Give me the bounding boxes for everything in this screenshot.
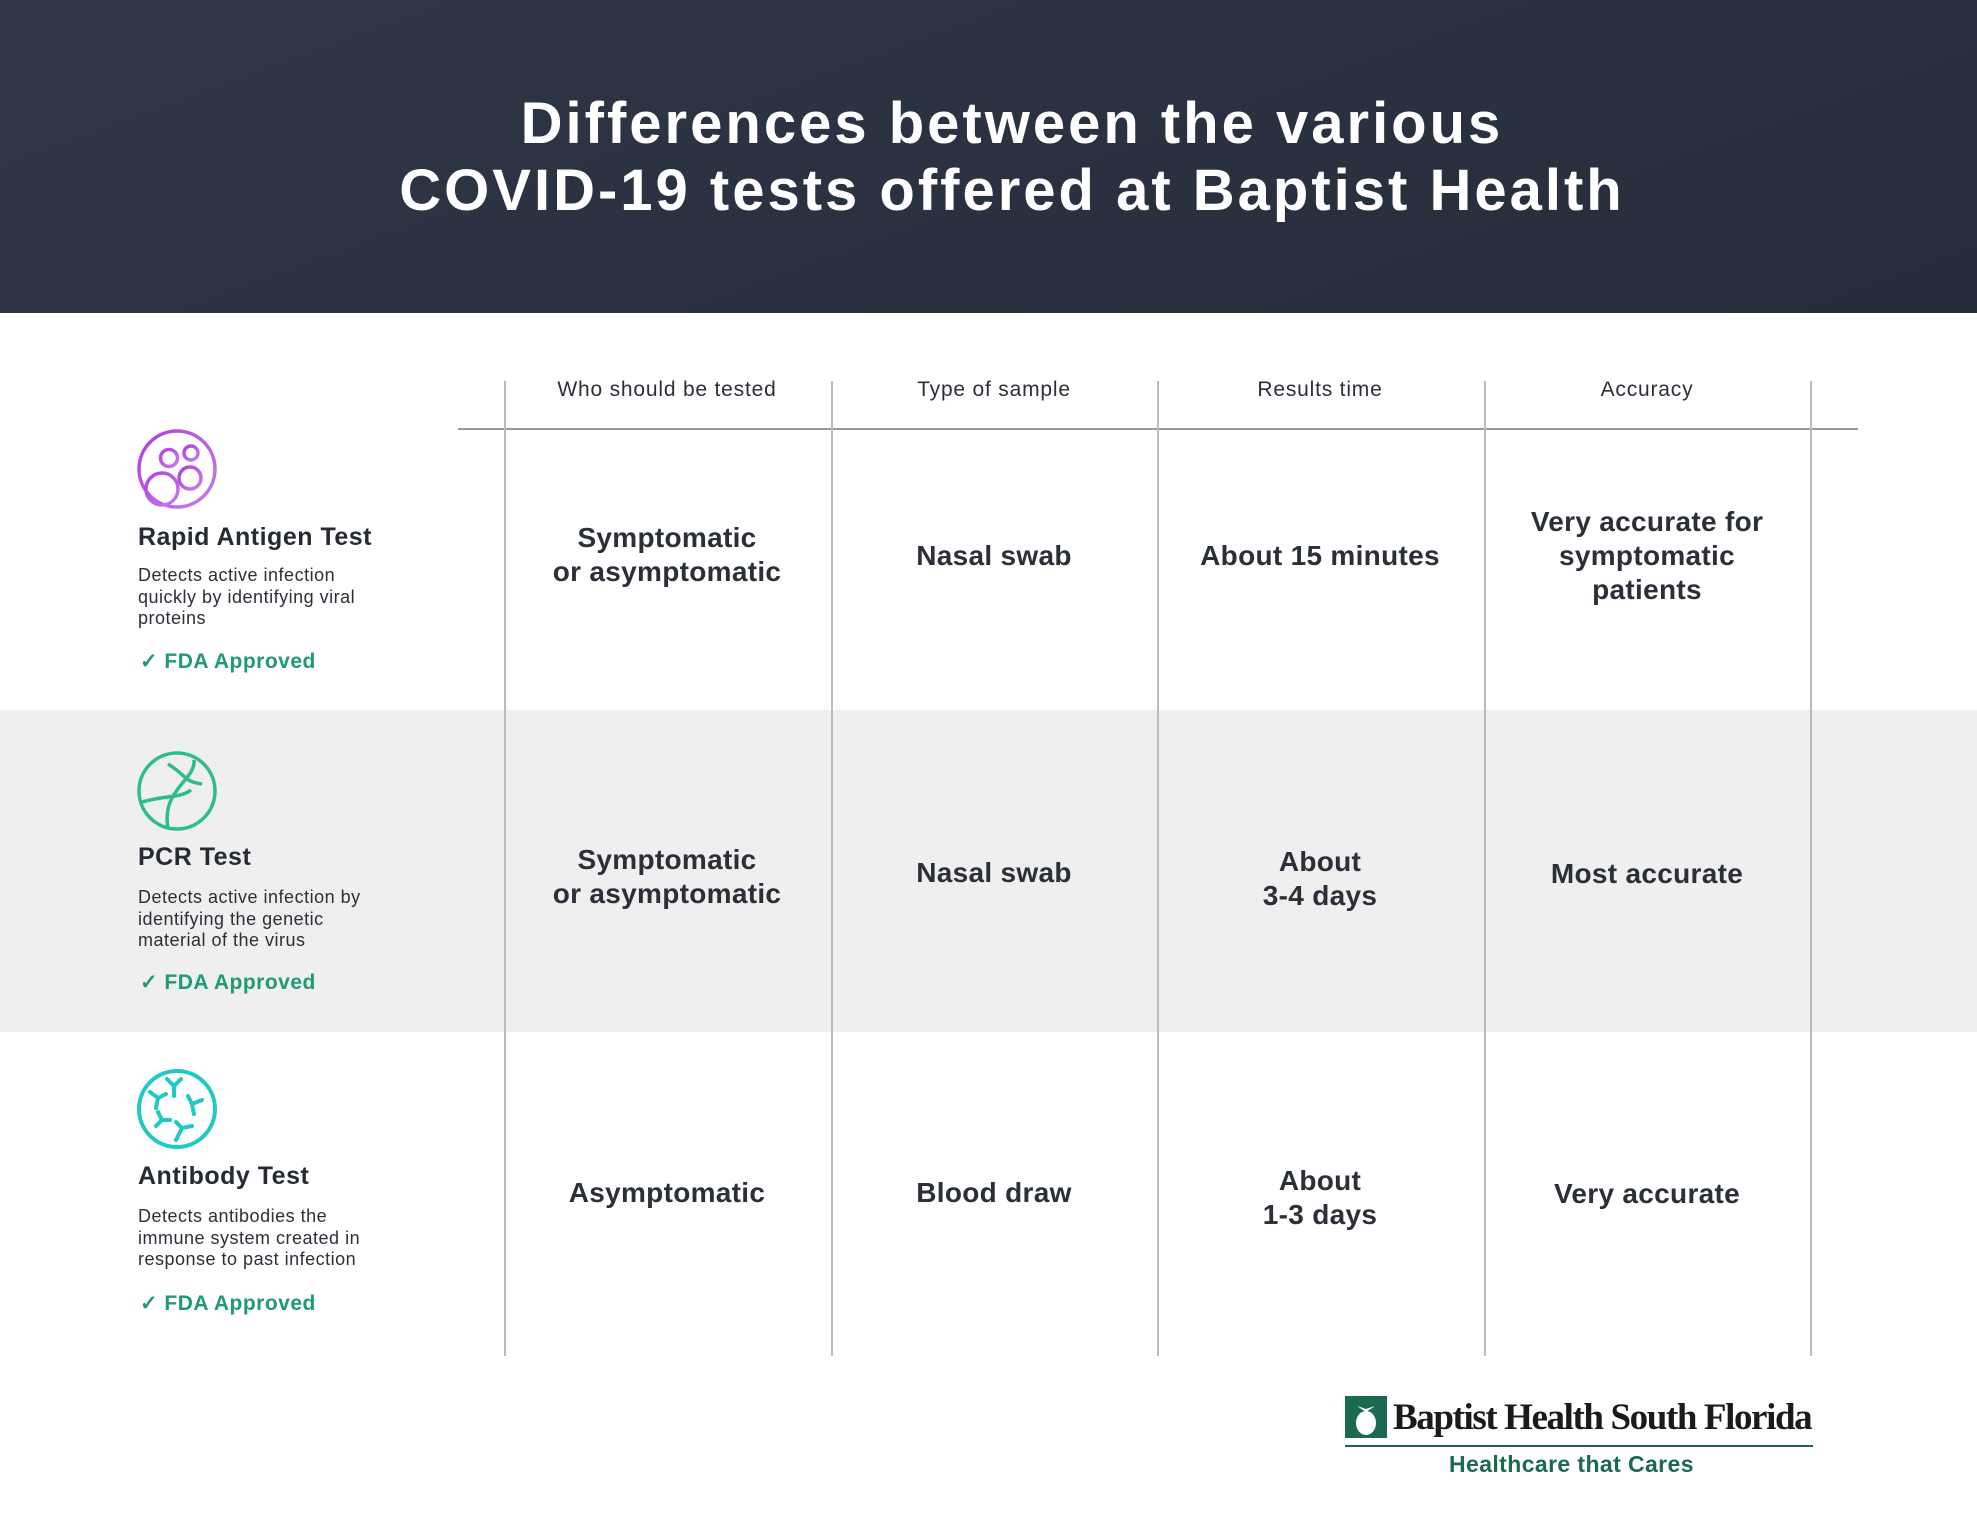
- row: rapid antigen: ✓ FDA Approved: [140, 650, 316, 673]
- row: antibody: 1-3 days: [1263, 1199, 1377, 1230]
- row: antibody: Blood draw: [916, 1177, 1072, 1208]
- row: PCR: material of the virus: [138, 930, 306, 950]
- title: Differences between the various: [521, 91, 1503, 156]
- row: PCR: [137, 751, 1743, 994]
- row: PCR: Symptomatic: [577, 844, 757, 875]
- row: rapid antigen: About 15 minutes: [1200, 540, 1440, 571]
- row: rapid antigen: Very accurate for: [1531, 506, 1763, 537]
- row: PCR: or asymptomatic: [553, 878, 781, 909]
- title: COVID-19 tests offered at Baptist Health: [399, 158, 1625, 223]
- row: rapid antigen: Nasal swab: [916, 540, 1072, 571]
- row: antibody: immune system created in: [138, 1228, 360, 1248]
- column headers: Results time: [1257, 378, 1383, 401]
- row: antibody: ✓ FDA Approved: [140, 1292, 316, 1315]
- row: PCR: Most accurate: [1551, 858, 1743, 889]
- icon: pineapple box: [1345, 1396, 1387, 1438]
- row: PCR: PCR Test: [138, 843, 251, 871]
- column headers: [557, 378, 1693, 401]
- row: PCR: Nasal swab: [916, 857, 1072, 888]
- row: antibody: Detects antibodies the: [138, 1206, 327, 1226]
- row: rapid antigen: patients: [1592, 574, 1702, 605]
- gray row band: [0, 710, 1977, 1032]
- tagline: Healthcare that Cares: [1449, 1451, 1694, 1477]
- row: antibody: Antibody Test: [138, 1162, 309, 1190]
- row: rapid antigen: [137, 429, 1763, 673]
- header banner: [0, 0, 1977, 313]
- row: rapid antigen: quickly by identifying viral: [138, 586, 355, 606]
- title: [399, 91, 1625, 223]
- row: rapid antigen: or asymptomatic: [553, 556, 781, 587]
- icon: antibodies: [137, 1069, 217, 1149]
- row: PCR: Detects active infection by: [138, 887, 361, 907]
- row: antibody: Very accurate: [1554, 1178, 1740, 1209]
- row: antibody: Asymptomatic: [569, 1177, 765, 1208]
- row: rapid antigen: Symptomatic: [577, 522, 757, 553]
- row: PCR: 3-4 days: [1263, 880, 1377, 911]
- row: antibody: About: [1279, 1165, 1361, 1196]
- row: rapid antigen: proteins: [138, 608, 206, 628]
- row: antibody: [137, 1069, 1740, 1315]
- row: rapid antigen: Detects active infection: [138, 565, 335, 585]
- row: PCR: ✓ FDA Approved: [140, 971, 316, 994]
- column headers: Type of sample: [917, 378, 1071, 401]
- row: rapid antigen: symptomatic: [1559, 540, 1735, 571]
- logo: [1345, 1396, 1813, 1477]
- row: PCR: About: [1279, 846, 1361, 877]
- row: rapid antigen: Rapid Antigen Test: [138, 523, 372, 551]
- row: antibody: response to past infection: [138, 1249, 356, 1269]
- column headers: Who should be tested: [557, 378, 777, 401]
- row: PCR: identifying the genetic: [138, 908, 324, 928]
- brand name: Baptist Health South Florida: [1393, 1397, 1811, 1438]
- icon: antigen cells: [137, 429, 217, 509]
- icon: DNA: [137, 751, 217, 831]
- column headers: Accuracy: [1601, 378, 1693, 401]
